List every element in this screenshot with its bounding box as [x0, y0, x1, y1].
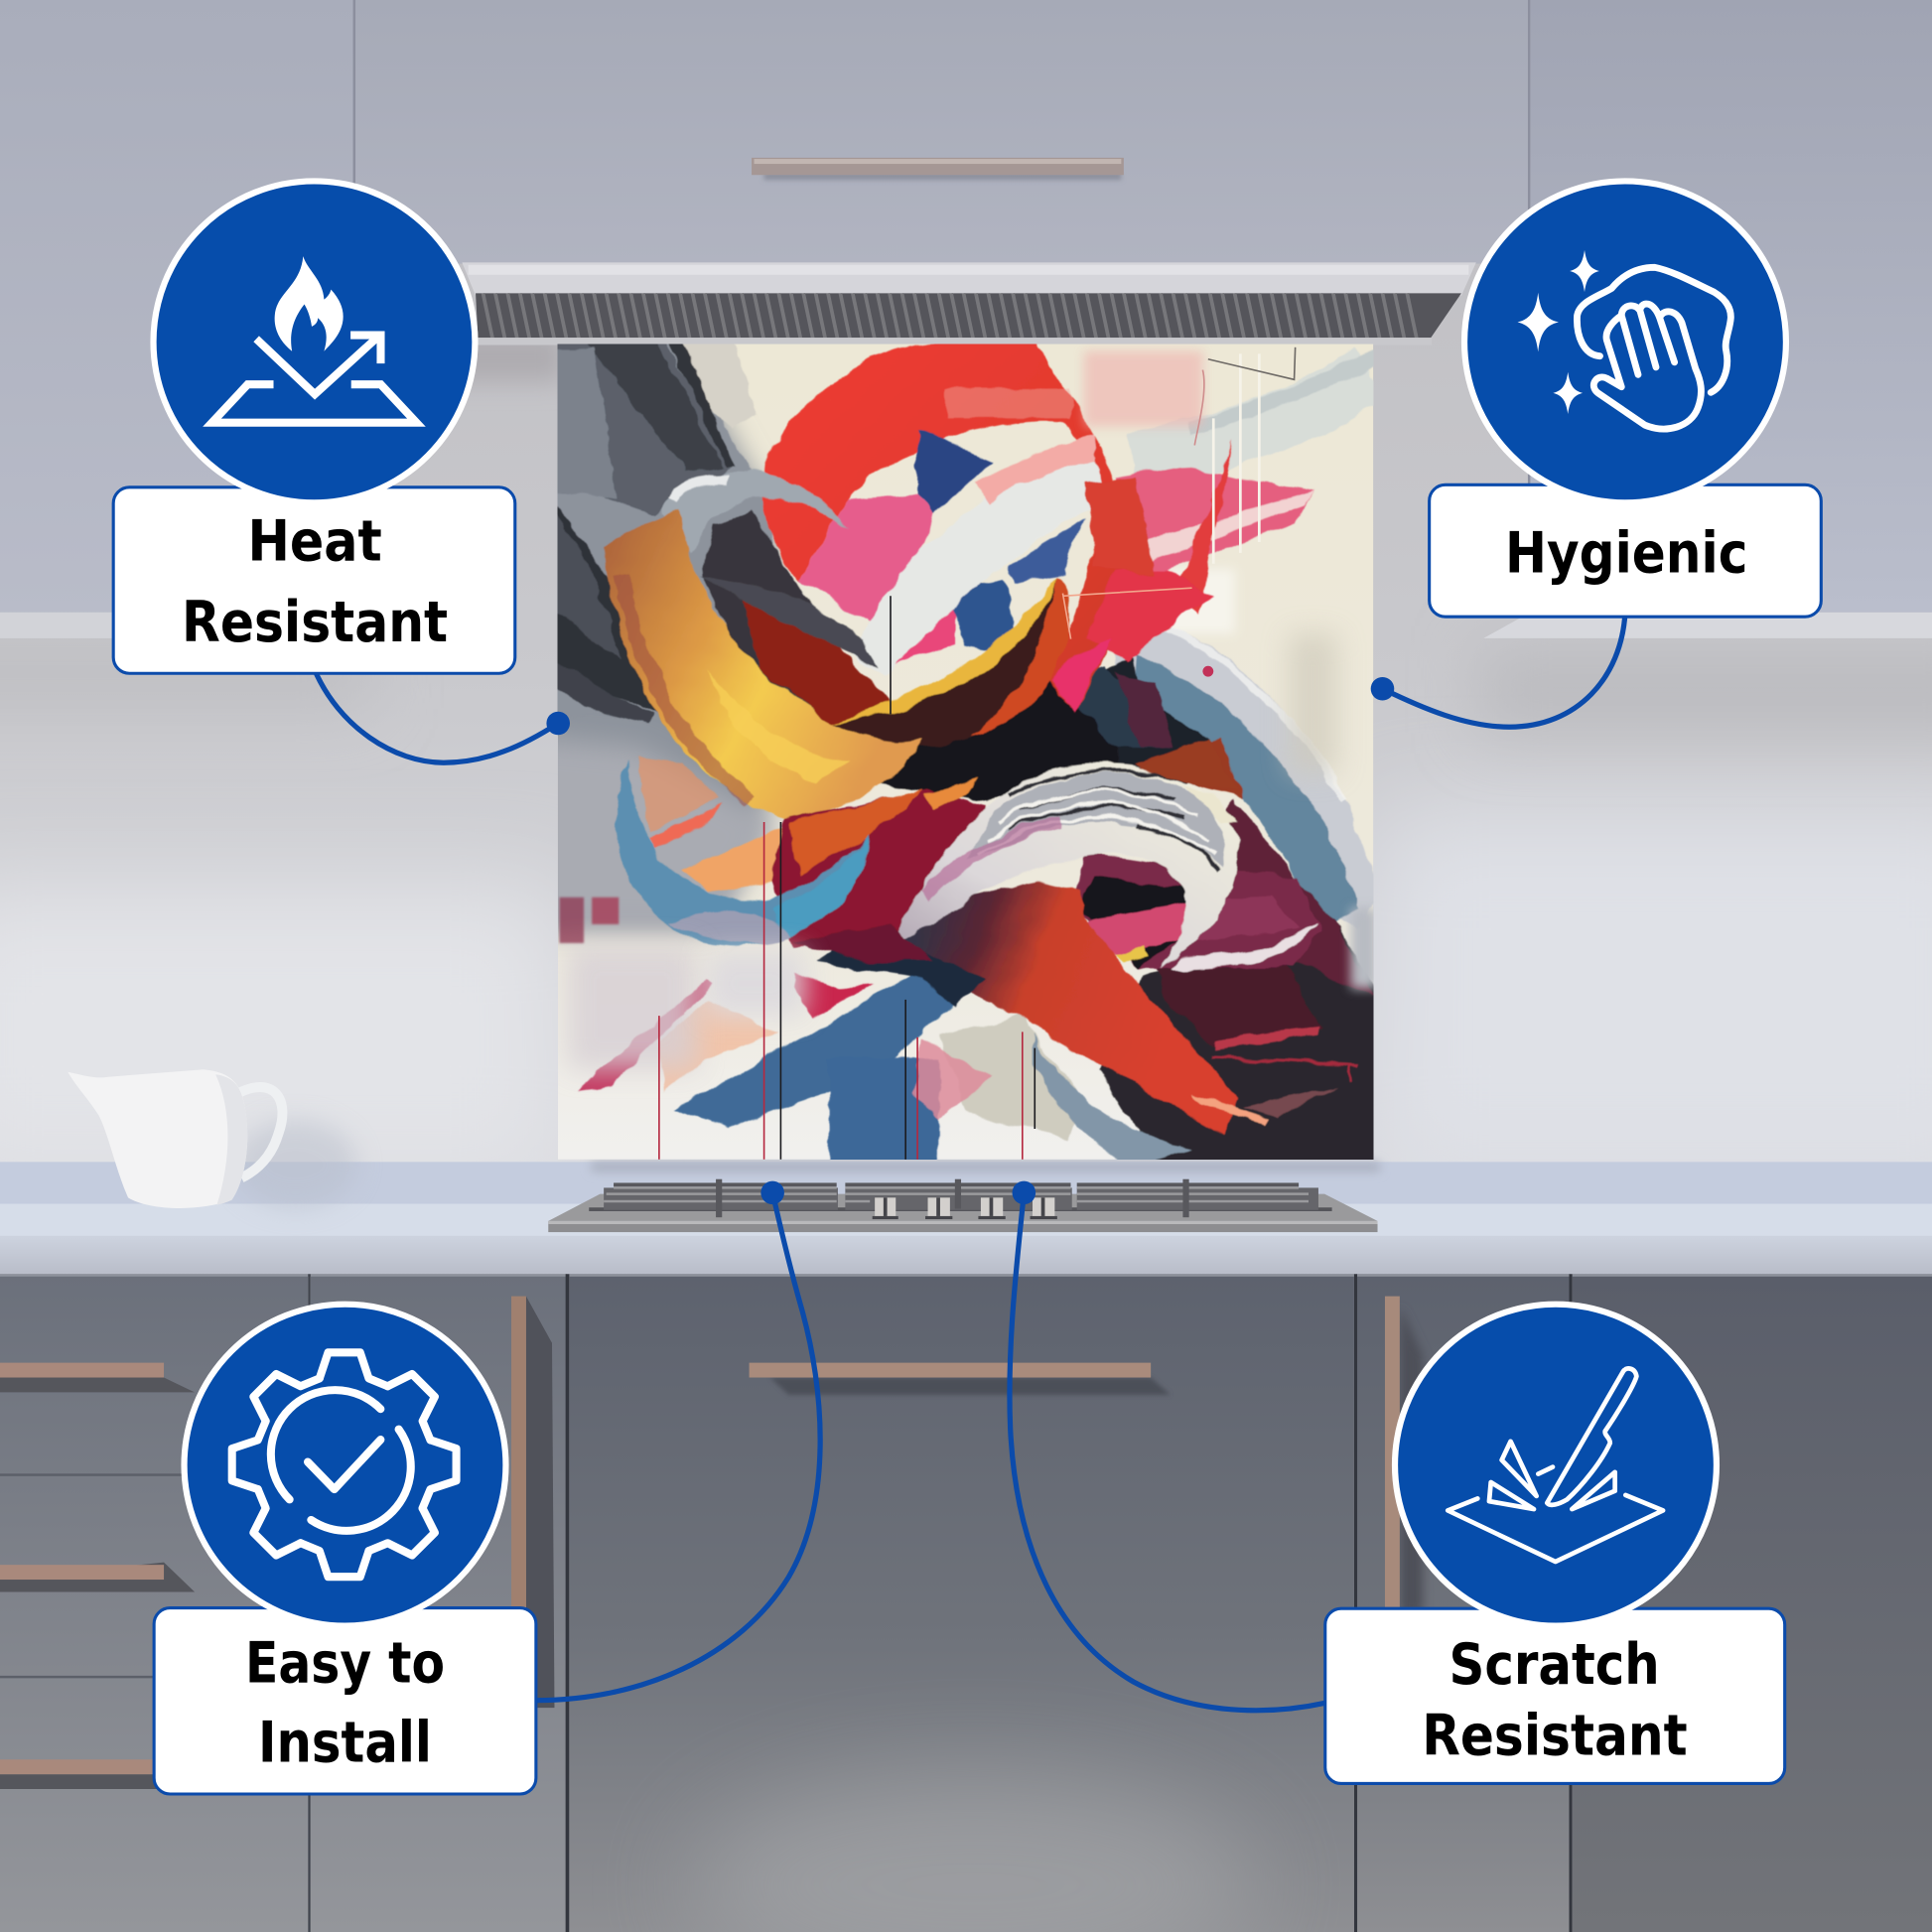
- bottom-right dark: [1100, 800, 1380, 1167]
- soft washes: [568, 946, 697, 1069]
- callout: hygienic: [1430, 181, 1821, 617]
- badge: scratch resistant: [1395, 1305, 1717, 1626]
- icon: gear with check mark: [232, 1352, 457, 1577]
- silver arc: [660, 472, 850, 553]
- label text: heat resistant: Heat: [247, 509, 382, 575]
- label text: easy to install: Easy to: [245, 1631, 445, 1697]
- dark centre: [815, 682, 1117, 801]
- ribbon yellow: [826, 577, 1058, 748]
- teapot: [68, 1069, 357, 1208]
- red stroke: [891, 880, 1238, 1135]
- big blue-grey arc: [1111, 607, 1378, 929]
- label text: hygienic: Hygienic: [1505, 520, 1747, 586]
- callout: easy to install: [154, 1305, 536, 1794]
- pink + white brush band: [799, 493, 933, 622]
- label text: scratch resistant: Scratch: [1449, 1632, 1660, 1698]
- label text: scratch resistant: Resistant: [1422, 1703, 1688, 1768]
- connector line: easy to install: [536, 1181, 820, 1701]
- main yellow swoosh: [605, 512, 923, 819]
- drips: [659, 822, 1023, 1160]
- badge: easy to install: [185, 1305, 505, 1626]
- icon: flame with deflecting arrow: [211, 256, 416, 423]
- orange / crimson centre: [637, 758, 719, 833]
- blue arc lower left: [617, 760, 871, 945]
- badge: hygienic: [1464, 181, 1786, 502]
- connector line: scratch resistant: [1010, 1181, 1325, 1711]
- cooktop: [548, 1179, 1378, 1232]
- artwork panel: [524, 316, 1380, 1172]
- connector line: hygienic: [1371, 613, 1625, 727]
- grey-blue lower right: [939, 1016, 1084, 1140]
- white crescent: [891, 762, 1239, 967]
- red ring: [763, 338, 1133, 712]
- callout: heat resistant: [113, 181, 515, 673]
- icon: knife scratching surface: [1448, 1368, 1663, 1562]
- callout: scratch resistant: [1325, 1305, 1785, 1783]
- left grey: [546, 338, 772, 715]
- label box: hygienic: [1430, 484, 1821, 617]
- top right: [1133, 375, 1369, 462]
- dark centre triangle & red block: [702, 510, 891, 725]
- badge: heat resistant: [154, 181, 475, 502]
- label box: easy to install: [154, 1608, 536, 1794]
- connector line: heat resistant: [314, 669, 570, 762]
- maroon behind crescent: [1073, 854, 1321, 967]
- label box: scratch resistant: [1325, 1608, 1785, 1783]
- label text: heat resistant: Resistant: [182, 590, 448, 655]
- icon: hand wiping with sparkles: [1518, 250, 1730, 429]
- lower left shards & blue: [579, 978, 714, 1091]
- label box: heat resistant: [113, 487, 515, 673]
- label text: easy to install: Install: [258, 1711, 432, 1776]
